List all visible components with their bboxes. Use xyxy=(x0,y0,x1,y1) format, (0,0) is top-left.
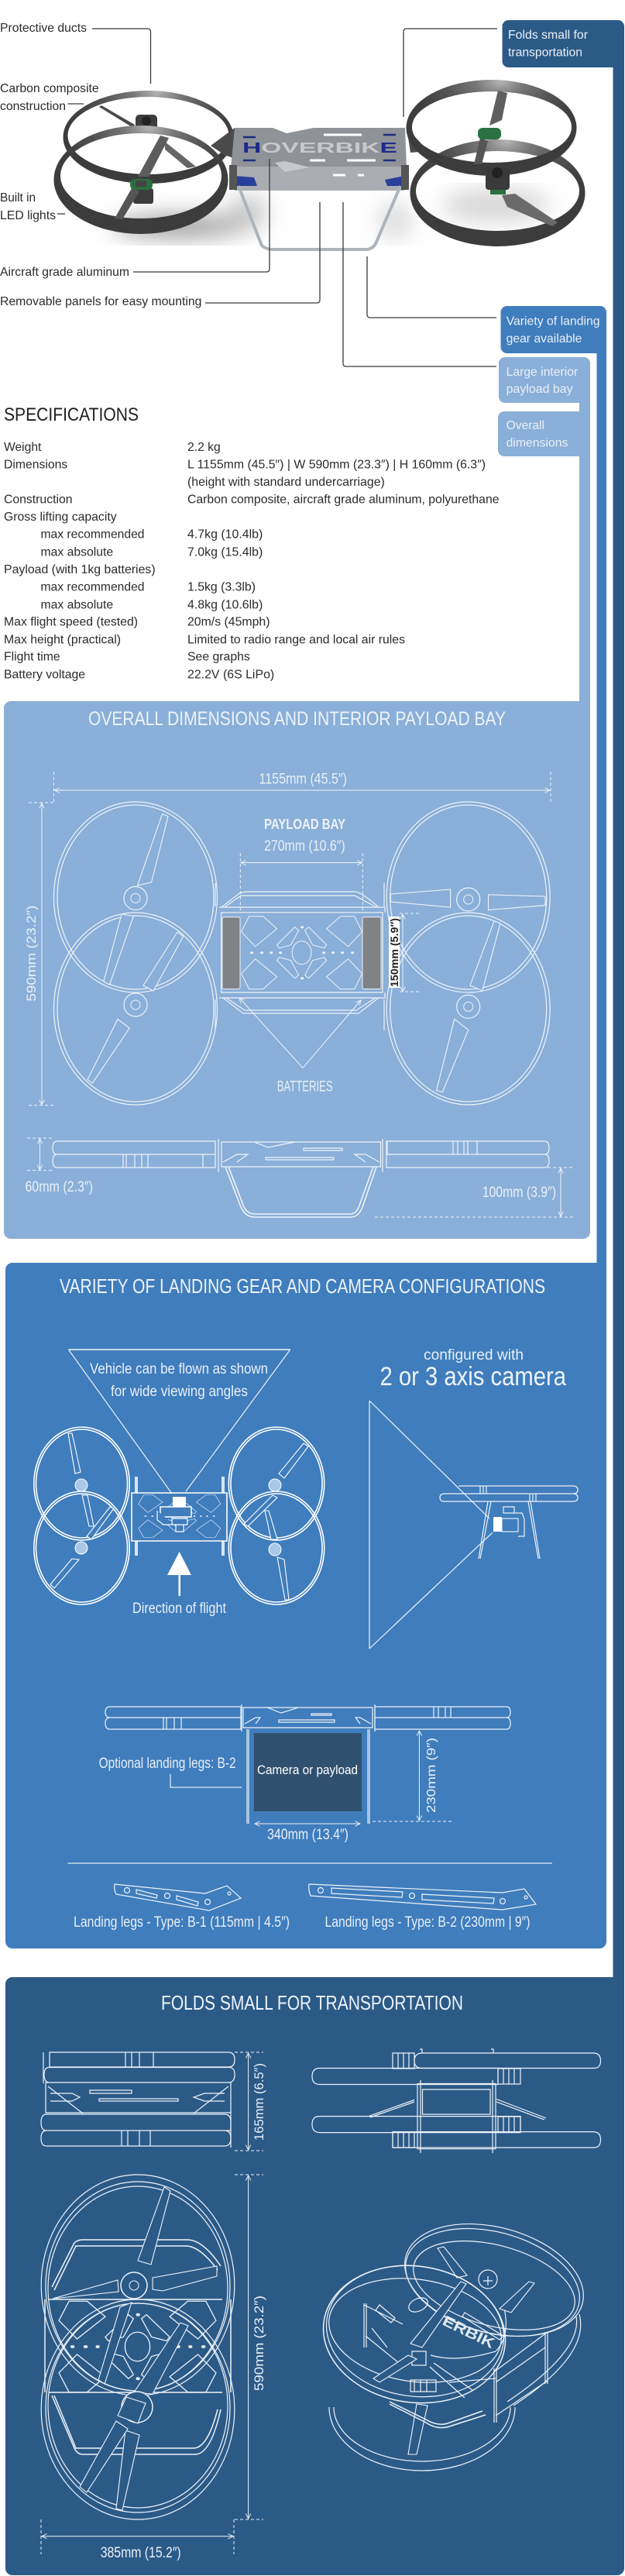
label: carbon composite construction: construction xyxy=(0,100,66,113)
panel: rendered drone with callouts xyxy=(0,22,586,366)
tab: folds small xyxy=(502,20,624,1983)
drawing: top view with dimensions xyxy=(24,772,551,1106)
camera or payload box xyxy=(254,1733,362,1811)
label: removable panels xyxy=(0,202,320,308)
callout: 2 or 3 axis camera: 2 or 3 axis camera xyxy=(379,1362,566,1391)
central frame xyxy=(215,883,386,1030)
interior height dimension xyxy=(389,913,421,992)
spec table: max absolute xyxy=(40,598,113,611)
drawing: side view with dimensions: 60mm (2.3″) xyxy=(25,1179,93,1195)
drawing: folded side view with 165mm dimension xyxy=(41,2052,266,2151)
leader lines to section tabs xyxy=(343,29,497,366)
drawing: folded top view with dimensions: 590mm (23.2″) xyxy=(252,2296,266,2391)
tab: variety of landing gear xyxy=(500,306,606,1271)
spec table: 4.7kg (10.4lb) xyxy=(187,528,263,542)
tab: large interior payload bay xyxy=(499,357,590,403)
payload bay label and width: PAYLOAD BAY xyxy=(264,817,345,832)
landing leg type B-1 xyxy=(74,1884,290,1931)
callout: optional landing legs xyxy=(99,1756,242,1787)
drawing: wide viewing angle top view: Direction of flight xyxy=(132,1601,227,1617)
spec table: Gross lifting capacity xyxy=(4,511,117,524)
camera mount xyxy=(157,1497,191,1532)
label: built in LED lights xyxy=(0,191,65,222)
camera or payload box: Camera or payload xyxy=(257,1763,358,1777)
upper front duct xyxy=(314,2254,514,2415)
drawing: wide viewing angle top view xyxy=(34,1350,325,1617)
callout: optional landing legs: Optional landing legs: B-2 xyxy=(99,1756,236,1772)
heading: FOLDS SMALL FOR TRANSPORTATION xyxy=(161,1991,463,2014)
landing leg type B-2: Landing legs - Type: B-2 (230mm | 9″) xyxy=(325,1914,530,1931)
heading: OVERALL DIMENSIONS AND INTERIOR PAYLOAD BAY xyxy=(88,708,506,730)
heading: specifications: SPECIFICATIONS xyxy=(4,404,139,425)
drawing: folded isometric view xyxy=(314,2206,596,2471)
spec table: Carbon composite, aircraft grade aluminum, polyurethane xyxy=(187,494,500,507)
drawing: folded top view with dimensions: 385mm (15.2″) xyxy=(101,2545,181,2561)
landing leg type B-1: Landing legs - Type: B-1 (115mm | 4.5″) xyxy=(74,1914,290,1931)
icon: drone render xyxy=(54,80,586,249)
tab: overall dimensions: Overall xyxy=(507,419,544,432)
spec table: Construction xyxy=(4,494,73,507)
upper rear duct xyxy=(392,2206,596,2354)
drone ground shadow xyxy=(112,188,550,240)
spec table: Flight time xyxy=(4,651,60,664)
drawing: top view with dimensions: 1155mm (45.5″) xyxy=(259,772,347,788)
spec table: 2.2 kg xyxy=(187,441,221,454)
batteries xyxy=(222,917,381,989)
spec table: Limited to radio range and local air rules xyxy=(187,633,405,646)
tab: folds small: Folds small for xyxy=(508,29,589,42)
label: built in LED lights: LED lights xyxy=(0,209,56,222)
drawing: camera side view xyxy=(369,1401,578,1649)
spec table: max recommended xyxy=(40,581,144,594)
drawing: wide viewing angle top view: for wide viewing angles xyxy=(111,1384,248,1400)
label: carbon composite construction xyxy=(0,82,99,113)
propeller blades xyxy=(53,2187,217,2510)
drawing: side view with dimensions: 100mm (3.9″) xyxy=(482,1185,556,1201)
tab: variety of landing gear: gear available xyxy=(507,332,582,346)
label: removable panels: Removable panels for easy mounting xyxy=(0,295,201,308)
frame and plate: ERBIK xyxy=(440,2313,497,2352)
spec table: 4.8kg (10.6lb) xyxy=(187,598,263,611)
drawing: folded front view xyxy=(312,2049,601,2153)
payload bay label and width xyxy=(240,817,362,912)
drawing: top view with dimensions: 590mm (23.2″) xyxy=(24,906,39,1002)
tab: large interior payload bay: Large interior xyxy=(507,366,579,379)
spec table: max absolute xyxy=(40,545,113,559)
payload bay label and width: 270mm (10.6″) xyxy=(264,838,345,855)
arrow: direction of flight xyxy=(167,1552,191,1596)
batteries callout: BATTERIES xyxy=(277,1079,333,1095)
spec table: Dimensions xyxy=(4,458,67,471)
tab: folds small: transportation xyxy=(508,46,582,59)
spec table xyxy=(4,441,500,681)
drawing: side view with optional legs: 230mm (9″) xyxy=(425,1738,438,1813)
icon: drone render: H OVERBIK E xyxy=(242,140,397,156)
panel: overall dimensions and interior payload bay xyxy=(4,357,590,1239)
spec table: 7.0kg (15.4lb) xyxy=(187,545,263,559)
tab: overall dimensions: dimensions xyxy=(507,437,568,450)
spec table: Payload (with 1kg batteries) xyxy=(4,563,156,576)
tab: large interior payload bay: payload bay xyxy=(507,383,573,396)
lower ducts xyxy=(329,2314,581,2471)
frame and plate xyxy=(364,2247,548,2423)
propeller ducts xyxy=(54,802,550,1105)
drawing: side view with dimensions xyxy=(25,1138,574,1217)
spec table: L 1155mm (45.5″) | W 590mm (23.3″) | H 160mm (6.3″) xyxy=(187,458,486,471)
interior height dimension: 150mm (5.9″) xyxy=(389,918,400,987)
spec table: max recommended xyxy=(40,528,144,542)
drawing: folded side view with 165mm dimension: 165mm (6.5″) xyxy=(252,2063,266,2141)
label: protective ducts: Protective ducts xyxy=(0,22,87,35)
spec table: 22.2V (6S LiPo) xyxy=(187,668,274,681)
label: protective ducts xyxy=(0,22,150,84)
landing leg type B-2 xyxy=(309,1884,536,1931)
label: aircraft grade aluminum xyxy=(0,159,270,279)
drawing: folded top view with dimensions xyxy=(41,2175,266,2561)
drawing: side view with optional legs: 340mm (13.4″) xyxy=(267,1827,349,1843)
spec table: See graphs xyxy=(187,651,250,664)
label: aircraft grade aluminum: Aircraft grade aluminum xyxy=(0,266,129,279)
drawing: side view with optional legs xyxy=(99,1704,510,1843)
batteries callout xyxy=(239,998,361,1095)
spec table: 1.5kg (3.3lb) xyxy=(187,581,256,594)
spec table: Battery voltage xyxy=(4,668,85,681)
spec table: Max height (practical) xyxy=(4,633,121,646)
spec table: Max flight speed (tested) xyxy=(4,616,138,629)
panel: variety of landing gear and camera configurations xyxy=(5,306,606,1948)
drawing: wide viewing angle top view: Vehicle can be flown as shown xyxy=(90,1361,268,1377)
label: built in LED lights: Built in xyxy=(0,191,36,205)
tab: variety of landing gear: Variety of landing xyxy=(507,315,600,328)
tab: overall dimensions xyxy=(498,391,590,709)
spec table: 20m/s (45mph) xyxy=(187,616,270,629)
spec table: Weight xyxy=(4,441,42,454)
spec table: (height with standard undercarriage) xyxy=(187,476,385,489)
callout: 2 or 3 axis camera: configured with xyxy=(424,1347,524,1364)
propeller blades xyxy=(50,1433,308,1600)
label: carbon composite construction: Carbon composite xyxy=(0,82,99,95)
callout: 2 or 3 axis camera xyxy=(379,1347,566,1391)
propeller blades xyxy=(88,814,545,1092)
